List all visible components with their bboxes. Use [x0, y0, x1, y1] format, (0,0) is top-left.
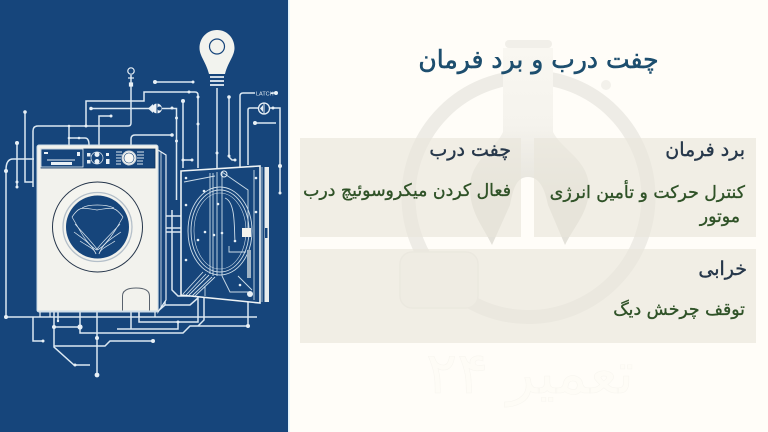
text: latch function: فعال کردن میکروسوئیچ درب — [303, 181, 511, 201]
circuit nodes — [4, 80, 282, 377]
panel: latch — [300, 138, 521, 237]
feet — [40, 312, 155, 317]
left blueprint panel — [0, 0, 290, 432]
icon: top symbol — [128, 68, 134, 86]
panel: fault — [300, 249, 756, 343]
door — [52, 182, 142, 272]
watermark logo: تعمیر ۲۴ — [426, 339, 634, 408]
text: fault symptom: توقف چرخش دیگ — [613, 300, 745, 320]
text: board function: کنترل حرکت و تأمین انرژی — [550, 183, 745, 203]
icon: light bulb — [200, 30, 234, 85]
control panel — [41, 149, 155, 168]
service hatch — [122, 288, 150, 311]
washing machine — [37, 145, 166, 312]
icon: connector left — [148, 103, 162, 114]
watermark logo — [408, 40, 649, 408]
title: چفت درب و برد فرمان — [418, 45, 659, 74]
heading: board: برد فرمان — [665, 139, 745, 161]
heading: fault: خرابی — [698, 258, 747, 280]
open door circuit board — [181, 166, 269, 303]
panel: board — [534, 138, 756, 237]
text: board function: موتور — [700, 207, 740, 227]
circuit wiring — [6, 75, 280, 375]
heading: latch: چفت درب — [429, 139, 511, 161]
latch label: LATCH — [256, 92, 274, 98]
icon: connector right — [258, 103, 270, 114]
text: board function — [550, 180, 746, 227]
